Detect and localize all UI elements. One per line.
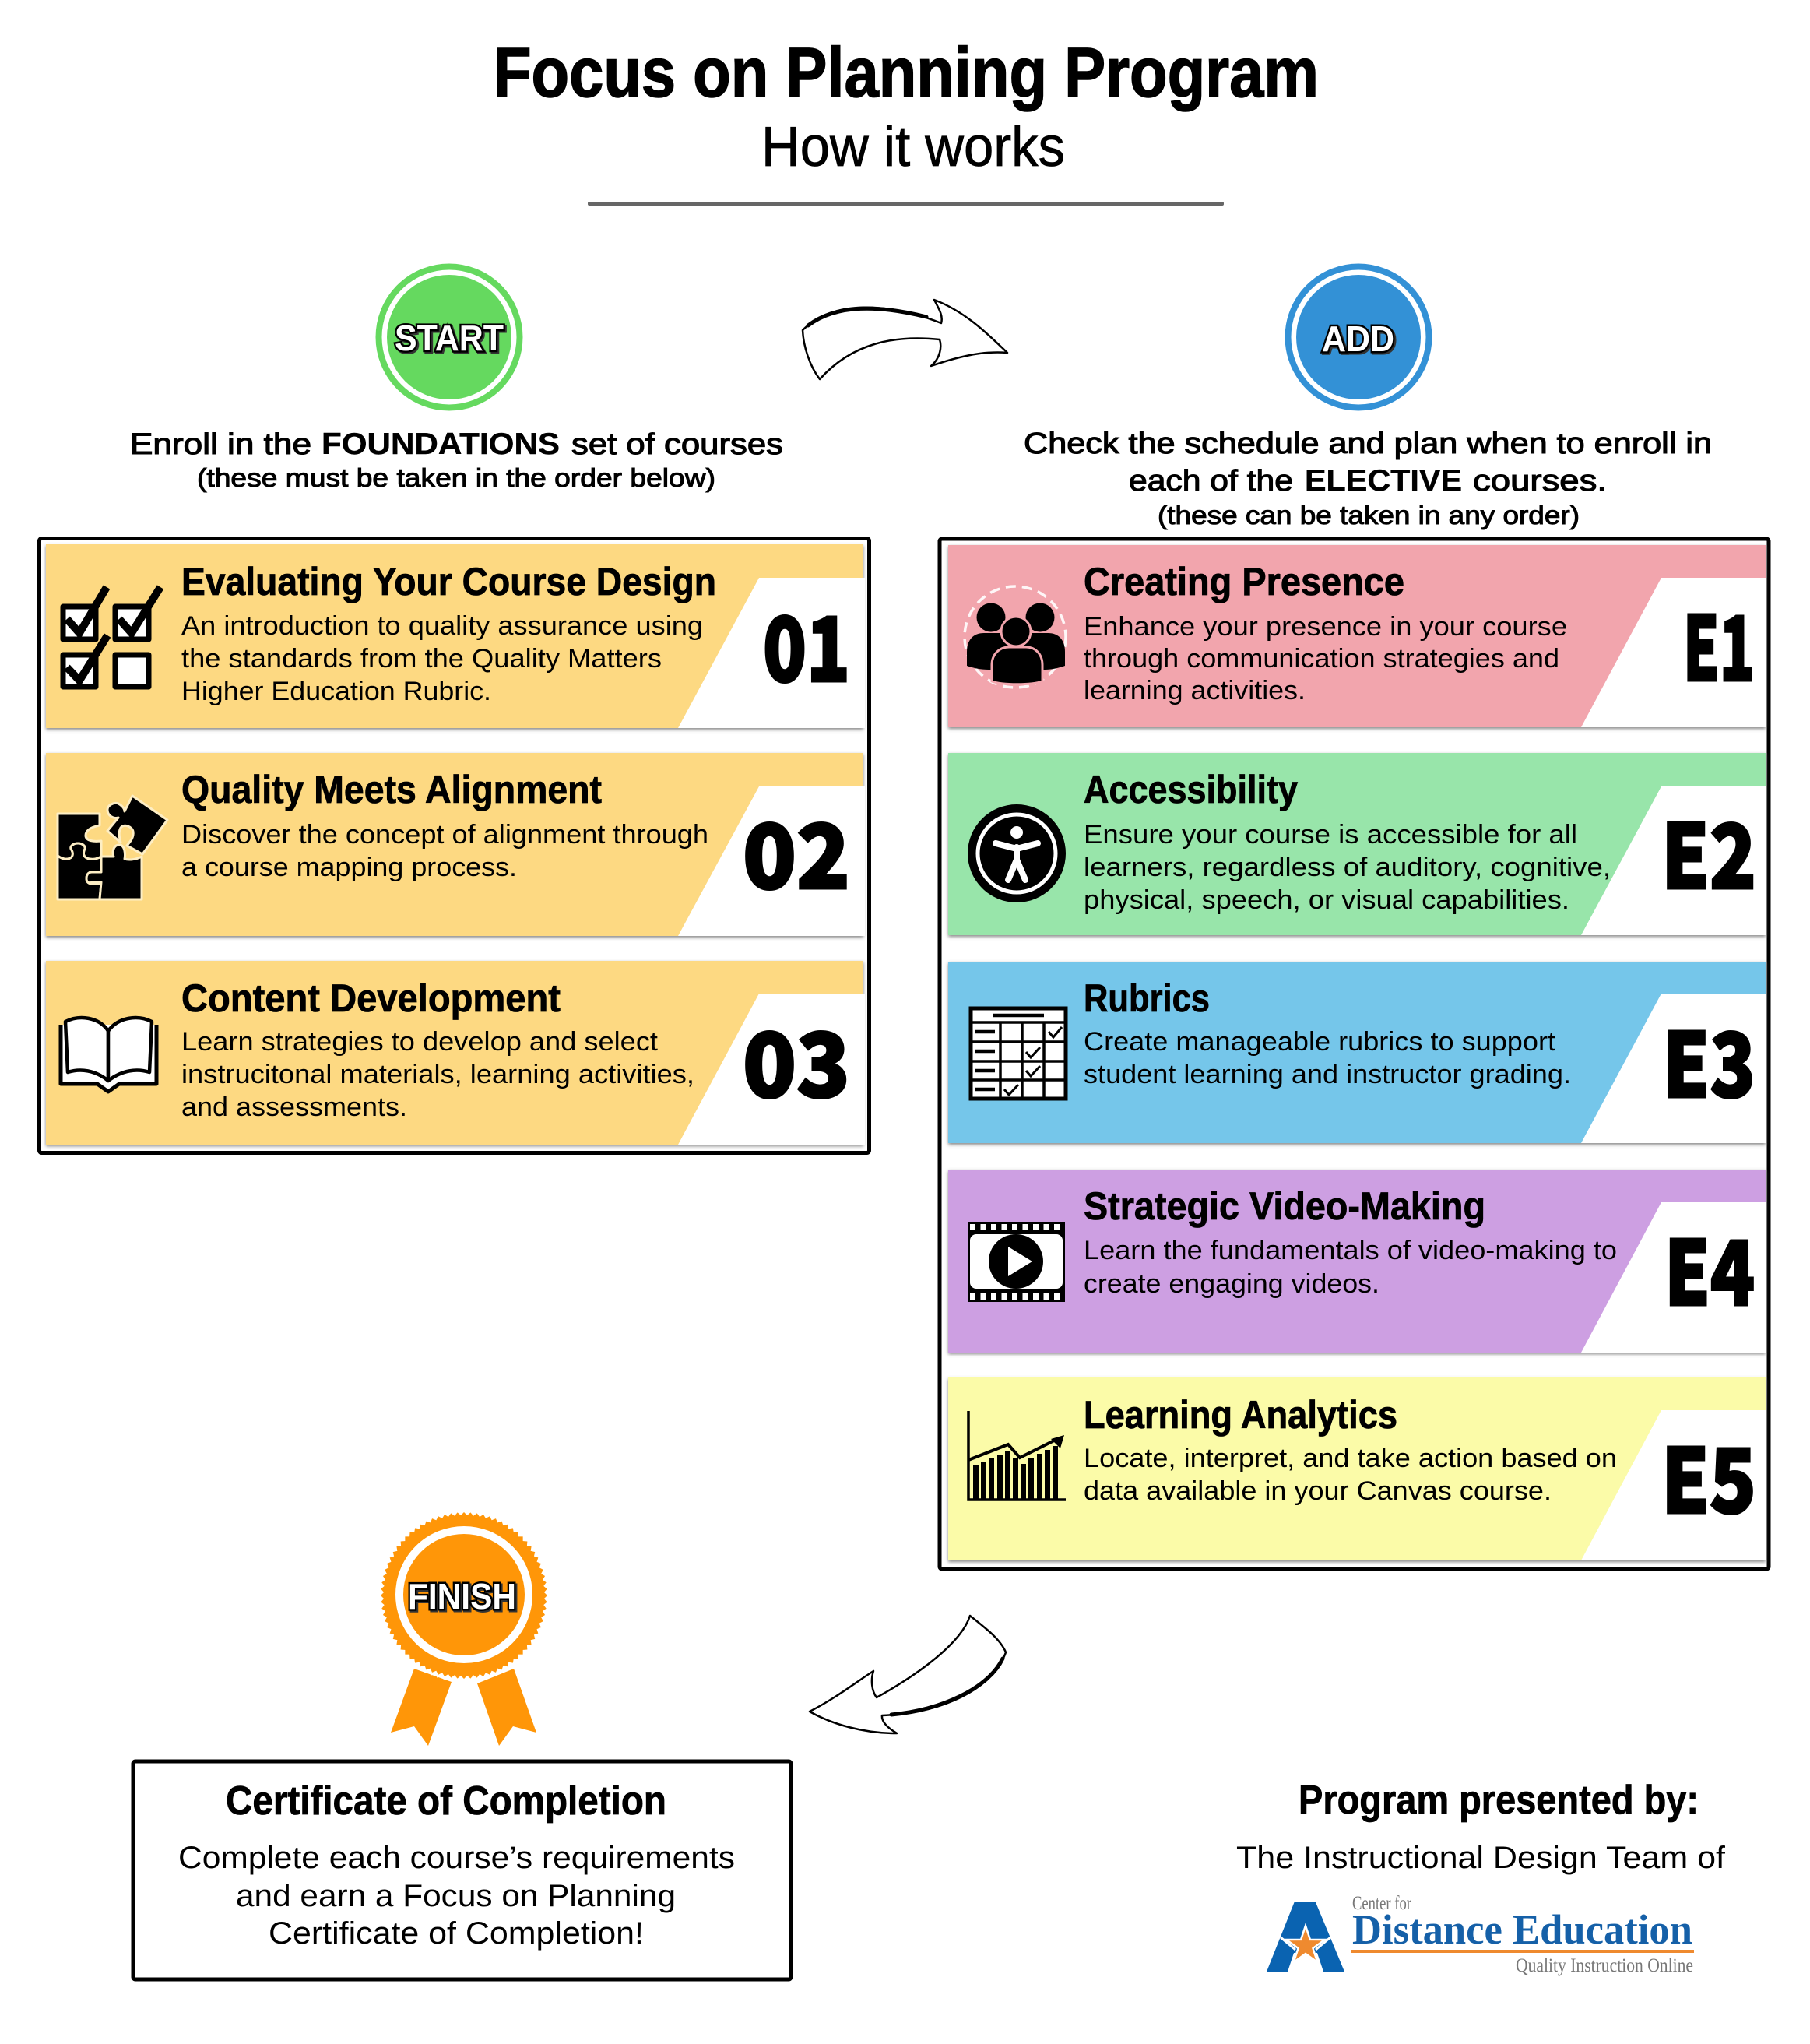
- card: 03: Content Development: [181, 976, 561, 1020]
- card: 02: [46, 753, 865, 936]
- card: E3: E3: [1663, 994, 1756, 1123]
- card: 03: and assessments.: [181, 1092, 407, 1122]
- logo: center for distance education: Quality Instruction Online: [1516, 1955, 1693, 1976]
- icon: checklist: [63, 587, 160, 687]
- foundations instructions: FOUNDATIONS: [322, 427, 560, 461]
- card: E2: physical, speech, or visual capabilities.: [1084, 885, 1569, 915]
- add badge: [1288, 266, 1429, 408]
- icon: analytics chart: [968, 1411, 1066, 1500]
- card: 01: the standards from the Quality Matters: [181, 644, 662, 674]
- elective instructions: courses.: [1473, 465, 1607, 498]
- start badge: [378, 266, 520, 408]
- title: Focus on Planning Program: [494, 34, 1319, 112]
- card: E1: Creating Presence: [1084, 560, 1404, 603]
- card: E4: [948, 1170, 1766, 1353]
- card: E2: Ensure your course is accessible for all: [1084, 820, 1577, 850]
- card: E3: Create manageable rubrics to support: [1084, 1027, 1556, 1057]
- card: E2: learners, regardless of auditory, cognitive,: [1084, 853, 1611, 882]
- card: 01: [46, 544, 865, 728]
- panel: certificate of completion: and earn a Focus on Planning: [236, 1879, 676, 1913]
- card: E5: E5: [1661, 1410, 1756, 1539]
- foundations instructions: [130, 427, 783, 492]
- finish ribbon badge: FINISH: [408, 1576, 516, 1617]
- card: E3: [948, 962, 1766, 1143]
- elective instructions: [1024, 427, 1712, 529]
- panel: certificate of completion: Certificate of Completion!: [269, 1916, 644, 1951]
- subtitle: How it works: [761, 116, 1065, 178]
- presented by: The Instructional Design Team of: [1236, 1841, 1726, 1875]
- card: E4: create engaging videos.: [1084, 1269, 1379, 1299]
- logo: center for distance education: [1267, 1893, 1694, 1976]
- card: E2: [948, 753, 1766, 935]
- presented by: Program presented by:: [1299, 1778, 1699, 1823]
- card: E3: student learning and instructor grading.: [1084, 1060, 1571, 1089]
- card: 02: a course mapping process.: [181, 853, 517, 882]
- icon: video film: [968, 1222, 1065, 1302]
- icon: rubric table: [971, 1008, 1066, 1099]
- start badge: START: [395, 318, 504, 358]
- add badge: ADD: [1322, 318, 1394, 359]
- panel: electives: [940, 539, 1769, 1569]
- finish ribbon badge: [381, 1512, 547, 1746]
- card: E1: E1: [1683, 578, 1755, 706]
- card: 03: [46, 961, 865, 1145]
- elective instructions: Check the schedule and plan when to enroll in: [1024, 427, 1712, 460]
- card: E1: learning activities.: [1084, 676, 1306, 705]
- card: E4: Strategic Video-Making: [1084, 1184, 1485, 1228]
- elective instructions: each of the: [1129, 465, 1293, 498]
- card: E1: Enhance your presence in your course: [1084, 612, 1567, 642]
- card: E2: Accessibility: [1084, 768, 1298, 811]
- arrow: electives to finish: [810, 1616, 1006, 1733]
- card: E4: E4: [1664, 1202, 1755, 1331]
- icon: puzzle: [58, 796, 167, 899]
- presented by: [1236, 1778, 1726, 1875]
- panel: certificate of completion: [133, 1761, 791, 1979]
- panel: certificate of completion: Complete each course’s requirements: [178, 1841, 735, 1875]
- card: E5: Locate, interpret, and take action based on: [1084, 1444, 1617, 1473]
- card: 01: An introduction to quality assurance using: [181, 611, 703, 641]
- card: 01: Higher Education Rubric.: [181, 677, 491, 706]
- card: 03: 03: [743, 994, 850, 1123]
- icon: accessibility: [968, 804, 1066, 902]
- elective instructions: ELECTIVE: [1305, 464, 1462, 498]
- elective instructions: (these can be taken in any order): [1158, 501, 1580, 529]
- card: E5: Learning Analytics: [1084, 1393, 1397, 1437]
- card: E3: Rubrics: [1084, 976, 1210, 1020]
- card: 01: Evaluating Your Course Design: [181, 560, 716, 603]
- card: 02: Quality Meets Alignment: [181, 768, 602, 811]
- icon: open book: [61, 1018, 156, 1092]
- card: 02: 02: [743, 786, 850, 914]
- panel: foundations: [39, 539, 869, 1152]
- icon: people: [965, 586, 1066, 688]
- card: E5: data available in your Canvas course.: [1084, 1476, 1552, 1506]
- arrow: start to add: [803, 300, 1007, 379]
- foundations instructions: set of courses: [571, 428, 783, 461]
- card: 01: 01: [763, 579, 850, 707]
- foundations instructions: Enroll in the: [130, 428, 311, 461]
- card: E1: [948, 545, 1766, 727]
- logo: center for distance education: Distance Education: [1352, 1906, 1692, 1953]
- foundations instructions: (these must be taken in the order below): [197, 463, 715, 492]
- card: E5: [948, 1377, 1766, 1560]
- card: E2: E2: [1661, 786, 1756, 914]
- logo: center for distance education: Center for: [1352, 1893, 1411, 1914]
- card: E1: through communication strategies and: [1084, 644, 1559, 674]
- card: E4: Learn the fundamentals of video-making to: [1084, 1236, 1617, 1265]
- card: 02: Discover the concept of alignment through: [181, 820, 708, 850]
- panel: certificate of completion: Certificate of Completion: [226, 1778, 666, 1824]
- card: 03: Learn strategies to develop and select: [181, 1027, 659, 1057]
- card: 03: instrucitonal materials, learning activities,: [181, 1060, 694, 1089]
